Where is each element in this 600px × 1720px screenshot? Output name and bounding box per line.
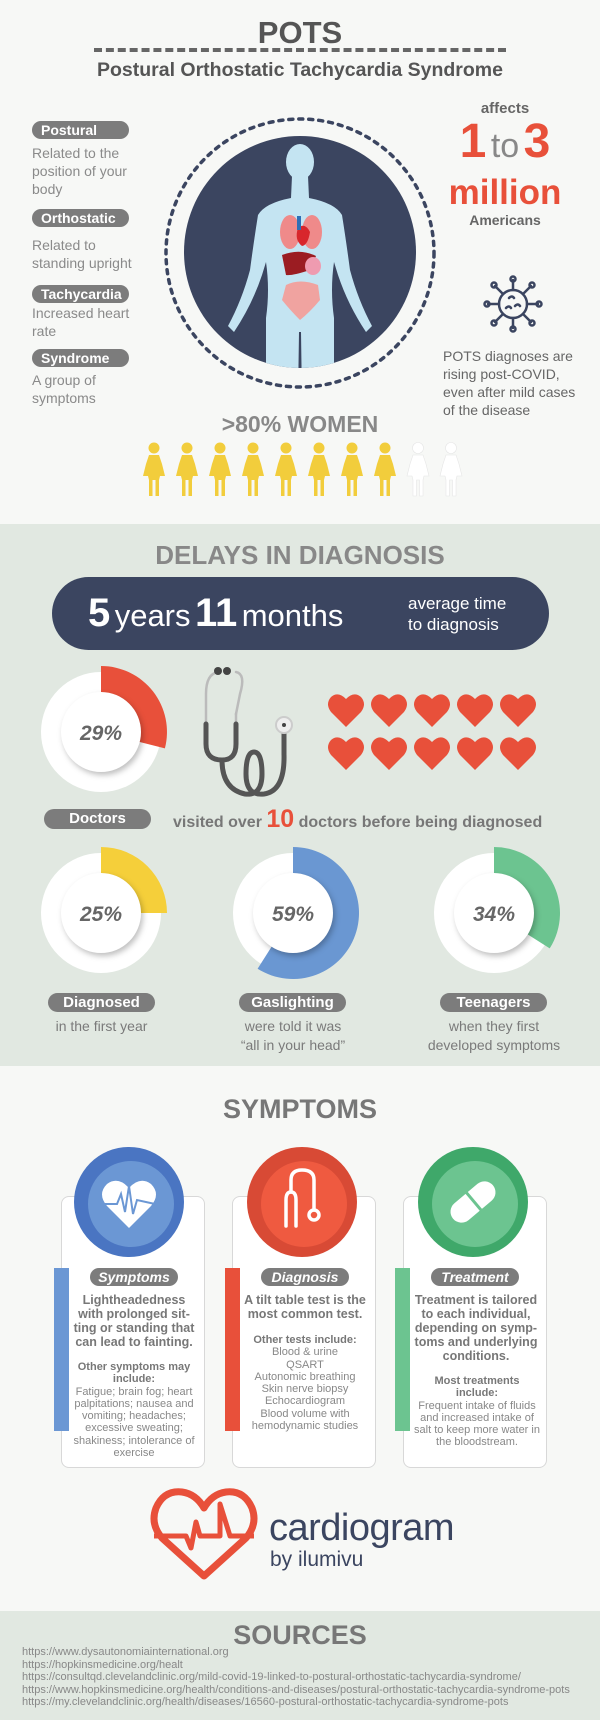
text: syndrome desc: A group of symptoms [32,372,96,406]
text: treatment other: Frequent intake of fluids and increased intake of salt to keep more water in the bloodstream. [414,1400,540,1448]
text: treatment main: Treatment is tailored to each individual, depending on symp-toms and underlying conditions. [415,1293,537,1363]
text: by ilumivu: by ilumivu [270,1548,363,1571]
label: Gaslighting: Gaslighting [251,994,334,1011]
chart: diagnosed donut 25%: 25% [79,903,122,926]
text: cardiogram: cardiogram [269,1507,454,1549]
label: Doctors: Doctors [69,810,126,827]
stat: 1 to 3 million: 1 to 3 [460,115,550,168]
text: diagnosis other: Other tests include: [253,1334,357,1346]
text: treatment other [414,1375,540,1448]
text: treatment other: Most treatments include: [435,1375,519,1399]
text: diagnosis other: Blood & urine [272,1346,338,1358]
text: post-COVID: POTS diagnoses are rising post-COVID, even after mild cases of the disease [443,348,575,418]
heading: >80% women: >80% WOMEN [222,411,378,437]
label: Teenagers: Teenagers [457,994,530,1011]
text: diagnosis other: Autonomic breathing [255,1371,355,1383]
subtitle [94,48,506,81]
banner: 5 years 11 months: 5 years 11 months [88,591,343,635]
text: in the first year: in the first year [56,1018,147,1034]
title: POTS [258,15,342,50]
label: Diagnosed [48,993,155,1012]
text: diagnosis other [252,1334,358,1432]
label: Diagnosed: Diagnosed [63,994,140,1011]
illustration: body in circle [164,117,436,389]
title pill: Treatment [431,1268,519,1286]
pill: Syndrome: Syndrome [41,350,109,366]
text: all in your head: “all in your head” [241,1037,345,1053]
panel: term definitions [32,121,132,406]
card: diagnosis [225,1147,376,1468]
stat: 1 to 3 million: affects [481,100,529,117]
icon: virus [483,275,543,333]
stat: 1 to 3 million [449,100,561,228]
bar: blue [54,1268,69,1431]
icon: stethoscope [204,667,293,797]
icon: heart logo [150,1488,258,1580]
banner: 5 years 11 months: average time [408,594,506,613]
chart: hearts x10 [328,694,536,770]
pill: Postural: Postural [41,122,97,138]
text: source urls: https://hopkinsmedicine.org/healt [22,1659,183,1671]
text: diagnosis other: Blood volume with hemodynamic studies [252,1408,358,1432]
text: source urls: https://my.clevelandclinic.org/health/diseases/16560-postural-orthostatic-tachycardia-syndrome-pots [22,1696,508,1708]
text: source urls [22,1646,570,1708]
label: Gaslighting [239,993,346,1012]
title pill: Treatment: Treatment [441,1269,509,1285]
icon: pill circle [418,1147,528,1257]
text: tachycardia desc: Increased heart rate [32,305,129,339]
chart: doctors donut 29% [41,666,167,792]
heading: sources: SOURCES [233,1620,367,1650]
pill: Orthostatic: Orthostatic [41,210,116,226]
pill: Postural [32,121,129,139]
chart: women pictogram [143,442,462,496]
banner: 5 years 11 months: to diagnosis [408,615,499,634]
text: diagnosis other: Skin nerve biopsy [262,1383,348,1395]
panel: sources [0,1611,600,1720]
heading: symptoms: SYMPTOMS [223,1094,377,1124]
text: source urls: https://www.hopkinsmedicine.org/health/conditions-and-diseases/postural-orthostatic-tachycardia-syndrome-pots [22,1684,570,1696]
chart: gaslighting donut 59% [233,847,359,979]
text: source urls: https://consultqd.clevelandclinic.org/mild-covid-19-linked-to-postural-orthostatic-tachycardia-syndrome/ [22,1671,521,1683]
card: treatment [395,1147,547,1468]
chart: doctors donut 29%: 29% [79,722,122,745]
text: orthostatic desc: Related to standing upright [32,237,132,271]
chart: gaslighting donut 59%: 59% [272,903,314,926]
chart: diagnosed donut 25% [41,847,167,973]
pill: Tachycardia: Tachycardia [41,286,122,302]
title pill: Diagnosis: Diagnosis [272,1269,338,1285]
subtitle: Postural Orthostatic Tachycardia Syndrome [97,59,503,81]
text: source urls: https://www.dysautonomiainternational.org [22,1646,229,1658]
icon: stethoscope circle [247,1147,357,1257]
organs [280,215,322,320]
logo: cardiogram [150,1488,454,1580]
pill: Syndrome [32,349,129,367]
panel: delays in diagnosis [0,524,600,1066]
text: when they first [428,1018,560,1053]
text: diagnosis main: A tilt table test is the most common test. [244,1293,366,1321]
text: all in your head: were told it was [245,1018,341,1034]
text: symptoms other: Fatigue; brain fog; heart palpitations; nausea and vomiting; headaches; excessive sweating; shakiness; intolerance of exercise [73,1386,195,1459]
banner: 5 years 11 months [52,577,549,650]
label: Doctors [44,809,151,829]
bar: green [395,1268,410,1431]
label: Teenagers [440,993,547,1012]
title pill: Diagnosis [261,1268,349,1286]
chart: teenagers donut 34% [434,847,560,973]
title pill: Symptoms: Symptoms [98,1269,170,1285]
text: symptoms main: Lightheadedness with prolonged sit-ting or standing that can lead to fainting. [74,1293,194,1349]
card: symptoms [54,1147,205,1468]
text: symptoms other: Other symptoms may include: [78,1361,190,1385]
stat: 1 to 3 million: million [449,173,561,212]
pill: Orthostatic [32,209,129,227]
icon: heart monitor circle [74,1147,184,1257]
stat: 1 to 3 million: Americans [469,212,541,228]
text: when they first: when they first [449,1018,539,1034]
text: visited over 10 doctors: visited over 10 doctors before being diagnosed [173,805,542,833]
text: when they first: developed symptoms [428,1037,560,1053]
text: diagnosis other: Echocardiogram [265,1395,345,1407]
bar: red [225,1268,240,1431]
heading: delays: DELAYS IN DIAGNOSIS [155,540,445,570]
chart: teenagers donut 34%: 34% [473,903,515,926]
text: all in your head [241,1018,345,1053]
text: postural desc: Related to the position of your body [32,145,127,197]
text: diagnosis other: QSART [286,1359,324,1371]
